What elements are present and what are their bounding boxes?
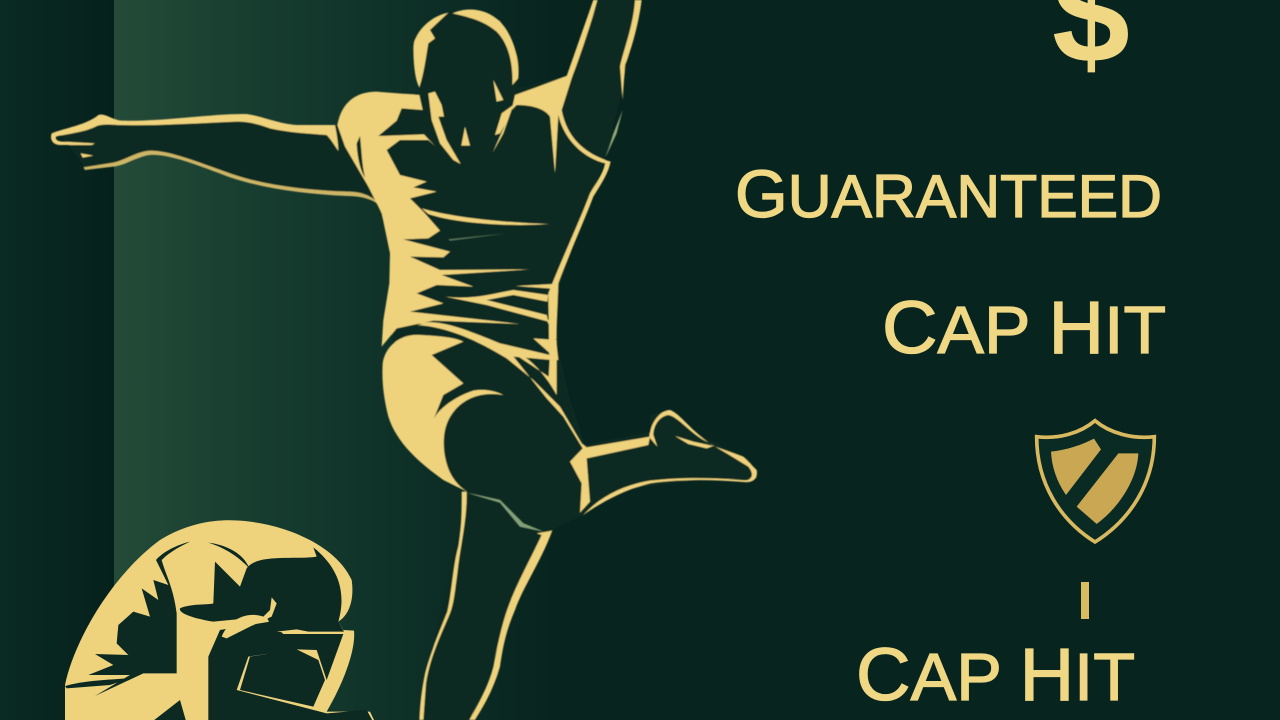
divider bar: [1081, 582, 1089, 619]
figure: leaping player: [51, 0, 757, 720]
torso, head and raised arm: [337, 0, 642, 360]
icon: shield: [1037, 421, 1154, 542]
label: Cap Hit: CAP HIT: [856, 633, 1135, 716]
crouching figure gold body: [65, 520, 374, 720]
standing leg outline: [419, 492, 467, 720]
hips and kicking leg: [382, 320, 757, 720]
heading: Cap Hit: CAP HIT: [882, 286, 1166, 369]
player body silhouette: [60, 0, 757, 720]
figure: crouching player: [65, 520, 374, 720]
heading: Guaranteed: GUARANTEED: [735, 157, 1162, 232]
crouching figure dark cut-outs: [65, 542, 374, 720]
arm outline: [51, 114, 380, 205]
